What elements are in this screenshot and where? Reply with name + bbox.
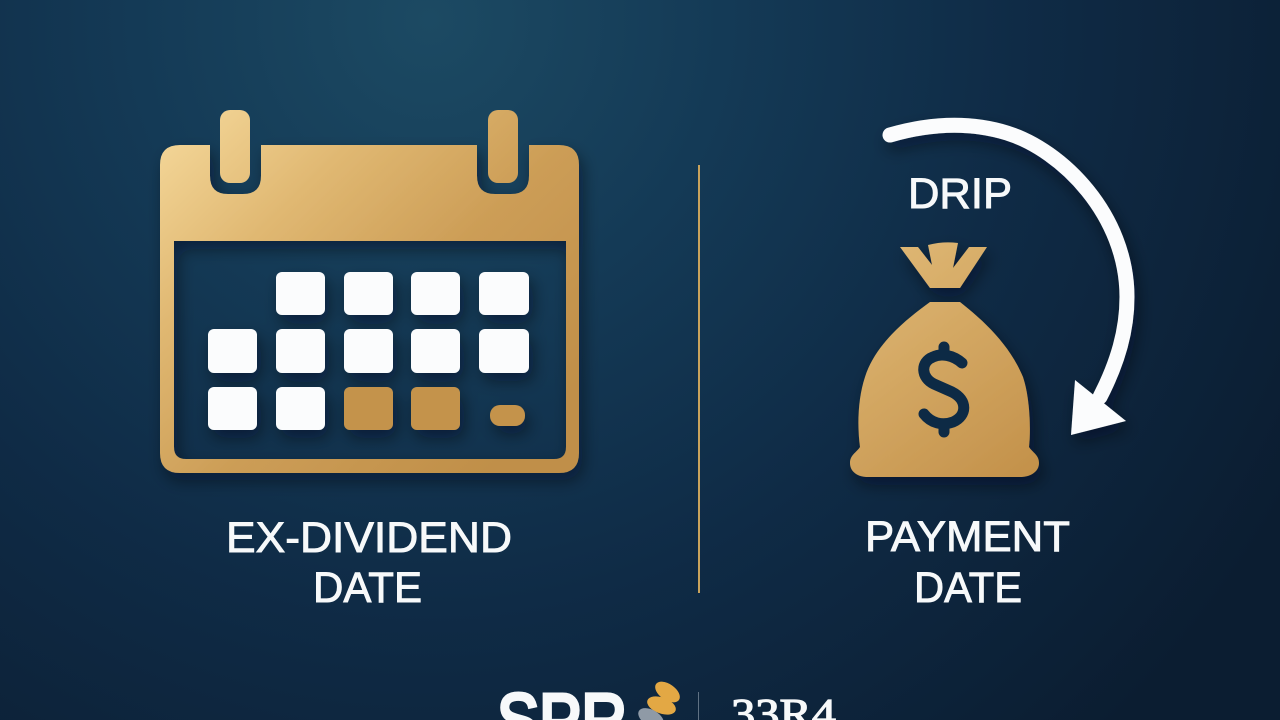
label: ex-dividend date: DATE — [313, 564, 422, 612]
center divider — [698, 165, 700, 593]
icon: calendar — [160, 110, 579, 473]
footer logo — [497, 677, 836, 720]
logo coins — [635, 677, 684, 720]
label: payment date: PAYMENT — [865, 513, 1070, 561]
arrow: DRIP cycle — [890, 125, 1127, 435]
bag body — [850, 302, 1039, 477]
logo divider — [698, 692, 699, 720]
label: ex-dividend date — [226, 514, 512, 612]
bag knot — [900, 242, 987, 288]
label: DRIP: DRIP — [908, 170, 1012, 218]
calendar binding rings — [220, 110, 518, 183]
icon: money bag — [850, 242, 1039, 477]
label: payment date: DATE — [914, 564, 1022, 612]
label: payment date — [865, 513, 1070, 612]
calendar day cells — [208, 272, 529, 430]
dollar sign — [924, 347, 964, 432]
label: ex-dividend date: EX-DIVIDEND — [226, 514, 512, 562]
calendar body — [160, 145, 579, 473]
